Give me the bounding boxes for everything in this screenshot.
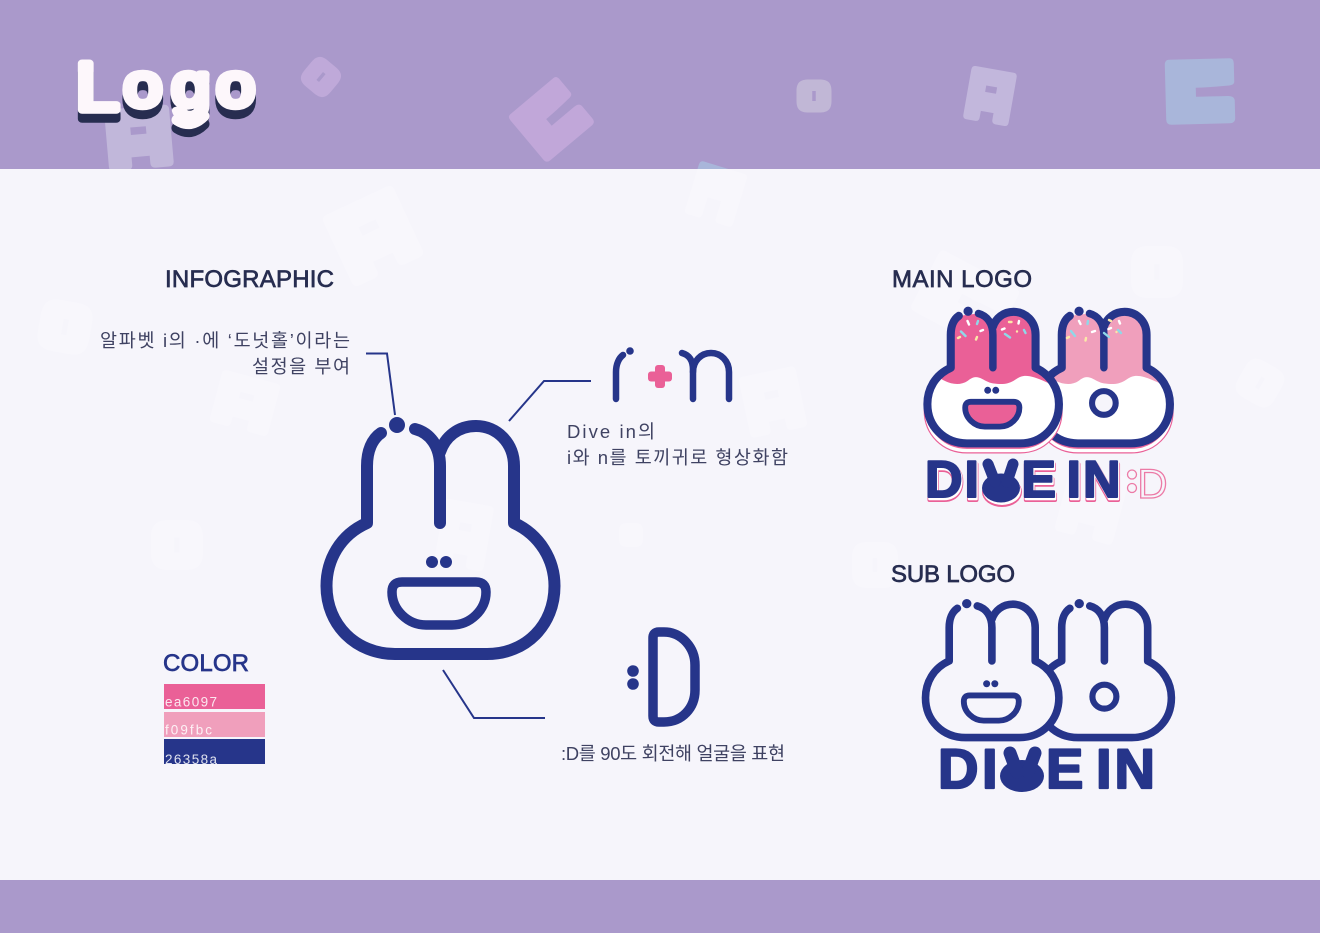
- annotation: donut hole text: [100, 330, 350, 377]
- annotation: donut hole text: 알파벳 i의 ·에 ‘도넛홀’이라는: [100, 330, 350, 351]
- leader line: ears: [509, 381, 591, 421]
- annotation: donut hole text: 설정을 부여: [252, 356, 350, 377]
- heading: sub logo: SUB LOGO: [891, 561, 1015, 588]
- left line rabbit: [926, 599, 1059, 738]
- leader line: dot: [366, 354, 395, 415]
- sub logo: [926, 599, 1171, 800]
- title: Logo: Logo: [76, 58, 255, 134]
- header band: [0, 0, 1320, 169]
- background pattern: faint letter shapes: [35, 160, 1289, 588]
- text: Dive in explanation: [567, 421, 788, 468]
- title: Logo: Logo: [76, 49, 255, 125]
- right pink donut rabbit: [1035, 307, 1173, 453]
- color swatches: [164, 684, 265, 767]
- wordmark: DIVE IN: DIVE IN: [938, 737, 1155, 800]
- heading: infographic: INFOGRAPHIC: [165, 266, 334, 293]
- right line rabbit: [1038, 599, 1171, 738]
- left pink rabbit with smile: [924, 307, 1062, 453]
- heading: main logo: MAIN LOGO: [892, 266, 1032, 293]
- color swatches: ea6097: [165, 694, 217, 710]
- text: face explanation: :D를 90도 회전해 얼굴을 표현: [561, 743, 785, 764]
- text: Dive in explanation: i와 n를 토끼귀로 형상화함: [567, 447, 788, 468]
- wordmark: DIVE IN: DIVE IN: [926, 454, 1122, 512]
- icon: i plus n: [616, 347, 729, 399]
- text: Dive in explanation: Dive in의: [567, 421, 655, 442]
- color swatches: f09fbc: [165, 722, 212, 738]
- footer band: [0, 880, 1320, 933]
- heading: color: COLOR: [163, 650, 249, 677]
- wordmark: colon D outline: :D: [1137, 460, 1168, 507]
- icon: central rabbit symbol: [326, 417, 554, 654]
- wordmark: DIVE IN: DIVE IN: [926, 453, 1122, 511]
- main logo: [924, 307, 1173, 512]
- leader line: face: [443, 670, 545, 718]
- wordmark: DIVE IN: DIVE IN: [925, 451, 1121, 509]
- icon: colon D: [627, 632, 695, 722]
- color swatches: 26358a: [165, 752, 217, 767]
